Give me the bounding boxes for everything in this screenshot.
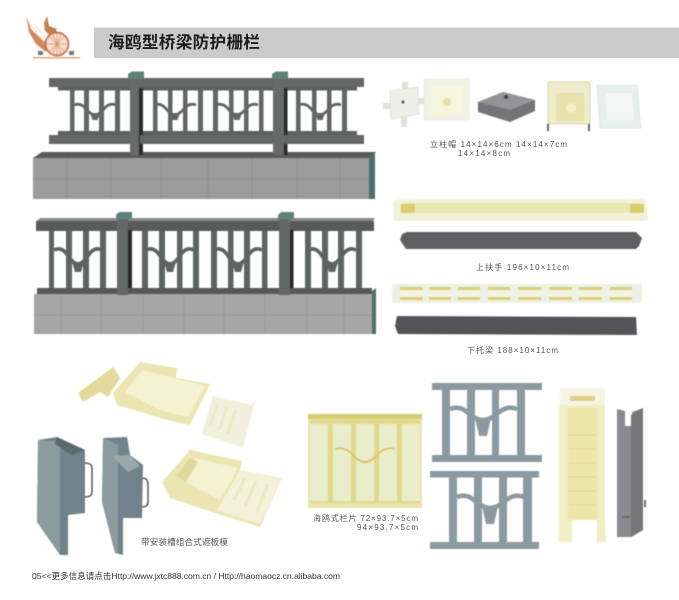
panel: lower beam (392, 284, 642, 355)
fence illustration 2 (34, 212, 376, 334)
seagull curves 2 (54, 249, 356, 272)
caption: column cap: 立柱帽 14×14×6cm 14×14×7cm (430, 139, 567, 149)
caption: cover board: 带安装槽组合式遮板模 (141, 536, 228, 547)
rails 1 (49, 78, 364, 144)
caption: lower beam: 下托梁 188×10×11cm (467, 345, 558, 355)
posts 1 (128, 72, 288, 155)
caption: railing size 1: 海鸥式栏片 72×93.7×5cm (313, 513, 418, 523)
panel: column cap moulds (383, 79, 641, 149)
icon: white ribbed plate (202, 396, 256, 448)
wall 1 (33, 152, 376, 199)
icon: tall yellow mould (559, 388, 606, 542)
icon: gray block 2 (102, 437, 148, 555)
posts 2 (116, 212, 294, 295)
icon: gray railing panel 2 (430, 471, 539, 549)
balusters 1 (70, 88, 347, 132)
icon: white cross plate (383, 82, 428, 127)
title: 海鸥型桥梁防护栅栏 (108, 32, 260, 52)
caption: column cap line 2: 14×14×8cm (458, 149, 510, 158)
logo: winged wheel (26, 16, 80, 58)
footer link line: 05<<更多信息请点击Http://www.jxtc888.com.cn / Http://haomaocz.cn.alibaba.com (32, 570, 340, 581)
icon: gray railing panel 1 (432, 383, 542, 462)
icon: beam mould (392, 284, 642, 303)
seagull curves 1 (74, 104, 341, 120)
icon: tall gray block (617, 408, 646, 537)
panel: cover board moulds (37, 362, 282, 555)
icon: yellow railing mould (308, 414, 422, 508)
rails 2 (36, 218, 375, 295)
icon: white lid (597, 85, 641, 128)
icon: beam bar (395, 316, 637, 335)
icon: yellow tray (113, 362, 210, 425)
fence illustration 1 (33, 72, 376, 199)
icon: white box mould (424, 79, 469, 120)
icon: handrail mould (393, 199, 648, 221)
icon: small yellow piece (78, 367, 120, 402)
wall 2 (34, 288, 376, 334)
balusters 2 (49, 230, 362, 290)
icon: gray block 1 (37, 437, 92, 555)
header bar (94, 28, 679, 58)
panel: seagull railing pieces (308, 383, 646, 549)
panel: top handrail (393, 199, 648, 272)
icon: yellow frame mould (547, 82, 590, 131)
caption: handrail: 上扶手 196×10×11cm (476, 262, 569, 272)
icon: gray cap (478, 92, 535, 122)
icon: handrail bar (400, 232, 642, 249)
icon: assembled yellow tray (162, 450, 282, 527)
caption: railing size 2: 94×93.7×5cm (357, 523, 418, 532)
